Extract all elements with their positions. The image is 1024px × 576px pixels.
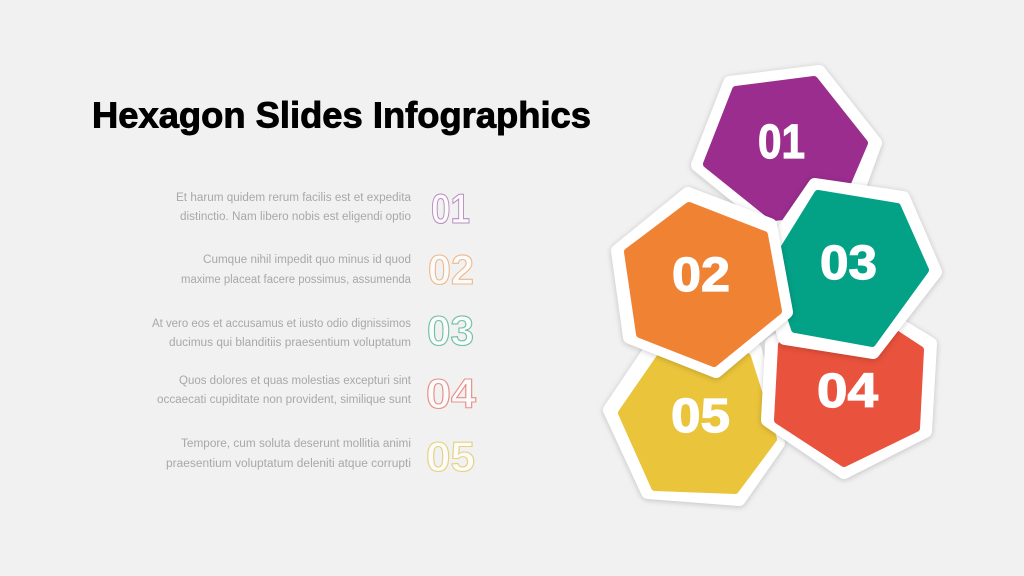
text block 03 [152, 318, 411, 349]
text block 01 [176, 192, 412, 223]
hexagon 01 purple [698, 72, 875, 225]
text block 03: ducimus qui blanditiis praesentium voluptatum [169, 337, 411, 349]
hexagon 04 red [768, 295, 930, 472]
hexagon 05 yellow [610, 318, 778, 499]
hexagon 03 teal: 03 [820, 237, 877, 290]
outlined number 02: 02 [428, 246, 474, 293]
hexagon 04 red: 04 [817, 365, 878, 418]
text block 02: Cumque nihil impedit quo minus id quod [203, 254, 411, 266]
text block 05: Tempore, cum soluta deserunt mollitia animi [181, 438, 411, 450]
outlined number 04: 04 [426, 370, 477, 417]
list item 02 [181, 246, 474, 293]
text block 02 [181, 254, 412, 286]
hexagon 01 purple: 01 [758, 116, 805, 169]
text block 04: Quos dolores et quas molestias excepturi sint [179, 375, 412, 387]
hexagon 03 teal [762, 185, 935, 352]
outlined number 01: 01 [431, 185, 470, 232]
text block 01: Et harum quidem rerum facilis est et expedita [176, 192, 412, 204]
outlined number 03: 03 [427, 307, 474, 354]
text block 04: occaecati cupiditate non provident, similique sunt [157, 394, 412, 406]
hexagon 05 yellow: 05 [671, 390, 730, 443]
list item 05 [166, 433, 475, 480]
list item 01 [176, 185, 470, 232]
outlined number 05: 05 [426, 433, 475, 480]
hexagon 02 orange: 02 [672, 249, 730, 302]
text block 05 [166, 438, 411, 470]
list item 03 [152, 307, 474, 354]
title: Hexagon Slides Infographics [92, 94, 591, 136]
hexagon 02 orange [618, 194, 786, 371]
text block 02: maxime placeat facere possimus, assumenda [181, 274, 412, 286]
text block 04 [157, 375, 412, 406]
text block 05: praesentium voluptatum deleniti atque corrupti [166, 458, 411, 470]
text block 03: At vero eos et accusamus et iusto odio dignissimos [152, 318, 411, 330]
text block 01: distinctio. Nam libero nobis est eligendi optio [180, 211, 411, 223]
list item 04 [157, 370, 477, 417]
